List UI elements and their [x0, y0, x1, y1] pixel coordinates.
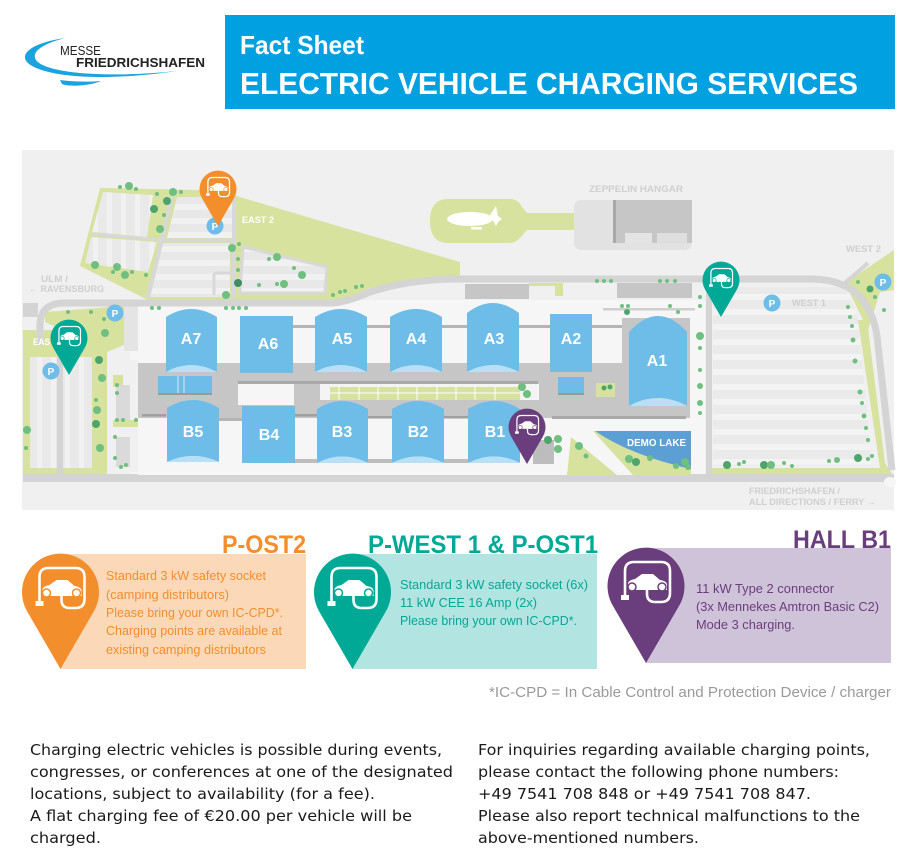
hall A6: A6	[258, 336, 278, 353]
hall B1	[468, 401, 520, 463]
hall A5	[315, 309, 367, 372]
text block: charging information: Charging electric vehicles is possible during events,	[30, 741, 442, 759]
hall A6	[240, 316, 293, 373]
title: Fact Sheet: Fact Sheet	[240, 30, 364, 60]
car park labels: WEST 2	[846, 244, 881, 255]
header banner	[225, 15, 895, 109]
small courtyard green	[596, 383, 615, 397]
title: Electric Vehicle Charging Services: ELECTRIC VEHICLE CHARGING SERVICES	[240, 66, 858, 101]
text: P-OST2 details: existing camping distributors	[106, 643, 266, 657]
small blue annex east	[558, 377, 584, 395]
logo: Messe Friedrichshafen: MESSE	[60, 44, 101, 58]
trees	[23, 182, 886, 470]
green area: west car park	[712, 320, 893, 475]
logo: Messe Friedrichshafen: FRIEDRICHSHAFEN	[76, 55, 205, 70]
hall A1: A1	[647, 353, 667, 370]
parking lots: east 2	[85, 192, 327, 298]
text block: charging information	[30, 741, 453, 847]
parking icons: P	[48, 367, 55, 378]
icon: teal charging pin	[314, 554, 391, 669]
logo: Messe Friedrichshafen	[25, 38, 205, 86]
map pin: teal, East 1	[51, 320, 87, 375]
hall B5	[167, 400, 219, 462]
exhibition centre: gray concourses	[138, 312, 690, 475]
green area: east 1 car park	[23, 330, 107, 475]
hall A5: A5	[332, 331, 352, 348]
car park labels: EAST 2	[242, 215, 274, 226]
car park labels: EAS	[33, 337, 50, 348]
hall B5: B5	[183, 424, 203, 441]
small blue annex west	[158, 376, 212, 395]
heading: P-OST2: P-OST2	[222, 531, 306, 559]
icon: orange charging pin	[22, 554, 99, 669]
hall A3: A3	[484, 331, 504, 348]
heading: P-West 1 and P-Ost1: P-WEST 1 & P-OST1	[368, 531, 598, 559]
parking icons: P	[769, 299, 776, 310]
B1 paved grid	[533, 440, 554, 464]
hall B3: B3	[332, 424, 352, 441]
map pin: orange, East 2	[200, 171, 236, 226]
green wedge beside demo lake	[567, 437, 617, 475]
text: P-OST2 details: Charging points are available at	[106, 624, 283, 638]
hall A1	[629, 316, 687, 406]
text: P-OST2 details	[106, 569, 283, 657]
footnote: *IC-CPD = In Cable Control and Protection Device / charger	[489, 685, 891, 701]
text block: contact information: above-mentioned numbers.	[478, 829, 699, 847]
map pin: teal, West 1	[703, 262, 739, 317]
car park labels: ALL DIRECTIONS / FERRY →	[749, 497, 876, 508]
demo lake: DEMO LAKE	[627, 438, 686, 449]
panel: P-West 1 and P-Ost1	[314, 531, 598, 669]
hall B3	[317, 401, 368, 463]
parking lots: east 1	[30, 357, 92, 468]
parking icons: P	[880, 278, 887, 289]
text: P-OST2 details: (camping distributors)	[106, 588, 229, 602]
text: P-West details: 11 kW CEE 16 Amp (2x)	[400, 596, 537, 610]
text block: charging information: A flat charging fee of €20.00 per vehicle will be	[30, 807, 412, 825]
parking icons	[42, 218, 892, 380]
parking icons: P	[212, 222, 219, 233]
text block: contact information: Please also report technical malfunctions to the	[478, 807, 860, 825]
green area: east car parks	[80, 188, 460, 303]
text block: charging information: congresses, or conferences at one of the designated	[30, 763, 453, 781]
text: P-West details: Please bring your own IC-CPD*.	[400, 614, 577, 628]
side buildings	[465, 283, 695, 310]
label: Ulm / Ravensburg	[29, 274, 104, 295]
hall B4	[242, 406, 295, 463]
demo lake	[593, 431, 691, 475]
hall A7	[166, 309, 217, 372]
hall A7: A7	[181, 331, 201, 348]
zeppelin hangar	[574, 200, 692, 250]
icon: purple charging pin	[608, 548, 684, 663]
site map	[22, 150, 896, 510]
hall B1: B1	[485, 424, 505, 441]
text block: contact information: For inquiries regarding available charging points,	[478, 741, 870, 759]
text: P-OST2 details: Standard 3 kW safety socket	[106, 569, 267, 583]
text block: contact information	[478, 741, 870, 847]
icon: zeppelin airship	[447, 206, 502, 230]
heading: Hall B1: HALL B1	[793, 526, 891, 554]
panel: P-OST2	[22, 531, 306, 669]
hall A4: A4	[406, 331, 426, 348]
hall A3	[467, 303, 519, 372]
hall A2	[550, 314, 592, 372]
label: Ulm / Ravensburg: ← RAVENSBURG	[29, 284, 104, 295]
text: Hall B1 details	[696, 582, 879, 632]
panel: Hall B1	[608, 526, 891, 663]
green courtyard strip	[320, 384, 539, 400]
parking lot: west 1	[713, 287, 872, 466]
text: P-West details: Standard 3 kW safety socket (6x)	[400, 578, 588, 592]
label: Zeppelin Hangar: ZEPPELIN HANGAR	[589, 184, 683, 195]
car park labels	[33, 215, 881, 508]
text block: contact information: +49 7541 708 848 or +49 7541 708 847.	[478, 785, 811, 803]
text: Hall B1 details: (3x Mennekes Amtron Basic C2)	[696, 600, 879, 614]
text: Hall B1 details: Mode 3 charging.	[696, 618, 795, 632]
hall A2: A2	[561, 331, 581, 348]
roads	[23, 263, 894, 478]
text: P-West details	[400, 578, 588, 628]
car park labels: WEST 1	[792, 298, 827, 309]
text block: charging information: locations, subject to availability (for a fee).	[30, 785, 375, 803]
hall B2: B2	[408, 424, 428, 441]
text block: contact information: please contact the following phone numbers:	[478, 763, 839, 781]
map pin: purple, Hall B1	[509, 409, 545, 464]
label: Ulm / Ravensburg: ULM /	[41, 274, 68, 285]
text block: charging information: charged.	[30, 829, 101, 847]
hall B2	[392, 401, 444, 463]
text: Hall B1 details: 11 kW Type 2 connector	[696, 582, 834, 596]
car park labels: FRIEDRICHSHAFEN /	[749, 486, 840, 497]
text: P-OST2 details: Please bring your own IC-CPD*.	[106, 606, 283, 620]
parking icons: P	[112, 309, 119, 320]
hall A4	[390, 309, 442, 372]
zeppelin field	[430, 199, 574, 243]
hall B4: B4	[259, 427, 279, 444]
